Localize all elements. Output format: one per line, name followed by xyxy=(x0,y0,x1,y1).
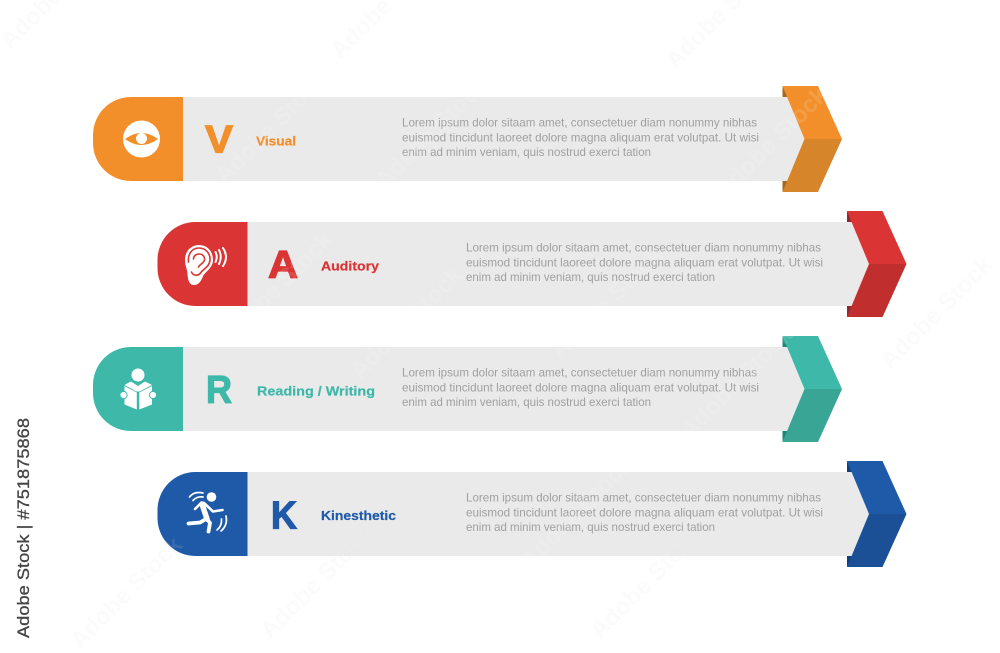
row: Auditory xyxy=(158,211,906,317)
icon: ear with sound waves xyxy=(185,245,226,285)
text block: reading description: Lorem ipsum dolor sitaam amet, consectetuer diam nonummy nibhas xyxy=(402,366,757,380)
text block: reading description xyxy=(402,366,759,409)
watermark: Adobe Stock overlays: Adobe Stock xyxy=(255,521,378,644)
icon tab: auditory colour cap xyxy=(158,222,248,306)
text block: reading description: enim ad minim veniam, quis nostrud exerci tation xyxy=(402,395,651,409)
text block: auditory description xyxy=(466,241,823,284)
watermark: Adobe Stock overlays: Adobe Stock xyxy=(585,521,708,644)
text block: kinesthetic description xyxy=(466,491,823,534)
label: Auditory: Auditory xyxy=(321,259,380,274)
arrow: reading chevron xyxy=(782,336,842,442)
watermark: Adobe Stock overlays: Adobe Stock xyxy=(370,71,493,194)
panel: reading grey bar xyxy=(183,347,805,431)
text block: auditory description: euismod tincidunt laoreet dolore magna aliquam erat volutpat. Ut wisi xyxy=(466,256,823,270)
arrow: kinesthetic chevron xyxy=(847,461,906,567)
letter V: V xyxy=(205,118,233,162)
letter K: K xyxy=(271,494,297,538)
text block: auditory description: Lorem ipsum dolor sitaam amet, consectetuer diam nonummy nibhas xyxy=(466,241,821,255)
row: Reading / Writing xyxy=(93,336,842,442)
watermark: Adobe Stock overlays: Adobe Stock xyxy=(210,66,333,189)
stock credit: vertical text: Adobe Stock | #751875868 xyxy=(14,418,33,638)
text block: kinesthetic description: enim ad minim veniam, quis nostrud exerci tation xyxy=(466,520,715,534)
watermark: Adobe Stock overlays: Adobe Stock xyxy=(710,81,833,204)
letter R: R xyxy=(206,368,232,412)
label: Reading / Writing: Reading / Writing xyxy=(257,384,375,399)
arrow: visual chevron xyxy=(782,86,842,192)
icon tab: reading colour cap xyxy=(93,347,183,431)
watermark: Adobe Stock overlays: Adobe Stock xyxy=(875,251,998,374)
text block: auditory description: enim ad minim veniam, quis nostrud exerci tation xyxy=(466,270,715,284)
icon: running person with motion lines xyxy=(188,492,226,532)
arrow: auditory chevron xyxy=(847,211,906,317)
label: Visual: Visual xyxy=(256,134,296,149)
panel: auditory grey bar xyxy=(248,222,870,306)
watermark: Adobe Stock overlays: Adobe Stock xyxy=(675,321,798,444)
letter A: A xyxy=(268,244,298,287)
text block: visual description: enim ad minim veniam, quis nostrud exerci tation xyxy=(402,145,651,159)
text block: visual description: euismod tincidunt laoreet dolore magna aliquam erat volutpat. Ut wisi xyxy=(402,130,759,144)
icon tab: kinesthetic colour cap xyxy=(158,472,248,556)
panel: visual grey bar xyxy=(183,97,805,181)
watermark: Adobe Stock overlays: Adobe Stock xyxy=(215,226,338,349)
watermark: Adobe Stock overlays: Adobe Stock xyxy=(345,261,468,384)
panel: kinesthetic grey bar xyxy=(248,472,870,556)
text block: visual description: Lorem ipsum dolor sitaam amet, consectetuer diam nonummy nibhas xyxy=(402,116,757,130)
text block: kinesthetic description: euismod tincidunt laoreet dolore magna aliquam erat volutpat. Ut wisi xyxy=(466,506,823,520)
text block: visual description xyxy=(402,116,759,159)
icon: person reading xyxy=(120,368,157,410)
icon: eye xyxy=(123,120,160,158)
watermark: Adobe Stock overlays: Adobe Stock xyxy=(515,451,638,574)
icon tab: visual colour cap xyxy=(93,97,183,181)
row: Visual xyxy=(93,86,842,192)
label: Kinesthetic: Kinesthetic xyxy=(321,508,396,523)
text block: reading description: euismod tincidunt laoreet dolore magna aliquam erat volutpat. Ut wisi xyxy=(402,380,759,394)
watermark: Adobe Stock overlays: Adobe Stock xyxy=(65,531,188,653)
row: Kinesthetic xyxy=(158,461,906,567)
watermark: Adobe Stock overlays: Adobe Stock xyxy=(545,241,668,364)
text block: kinesthetic description: Lorem ipsum dolor sitaam amet, consectetuer diam nonummy nibhas xyxy=(466,491,821,505)
